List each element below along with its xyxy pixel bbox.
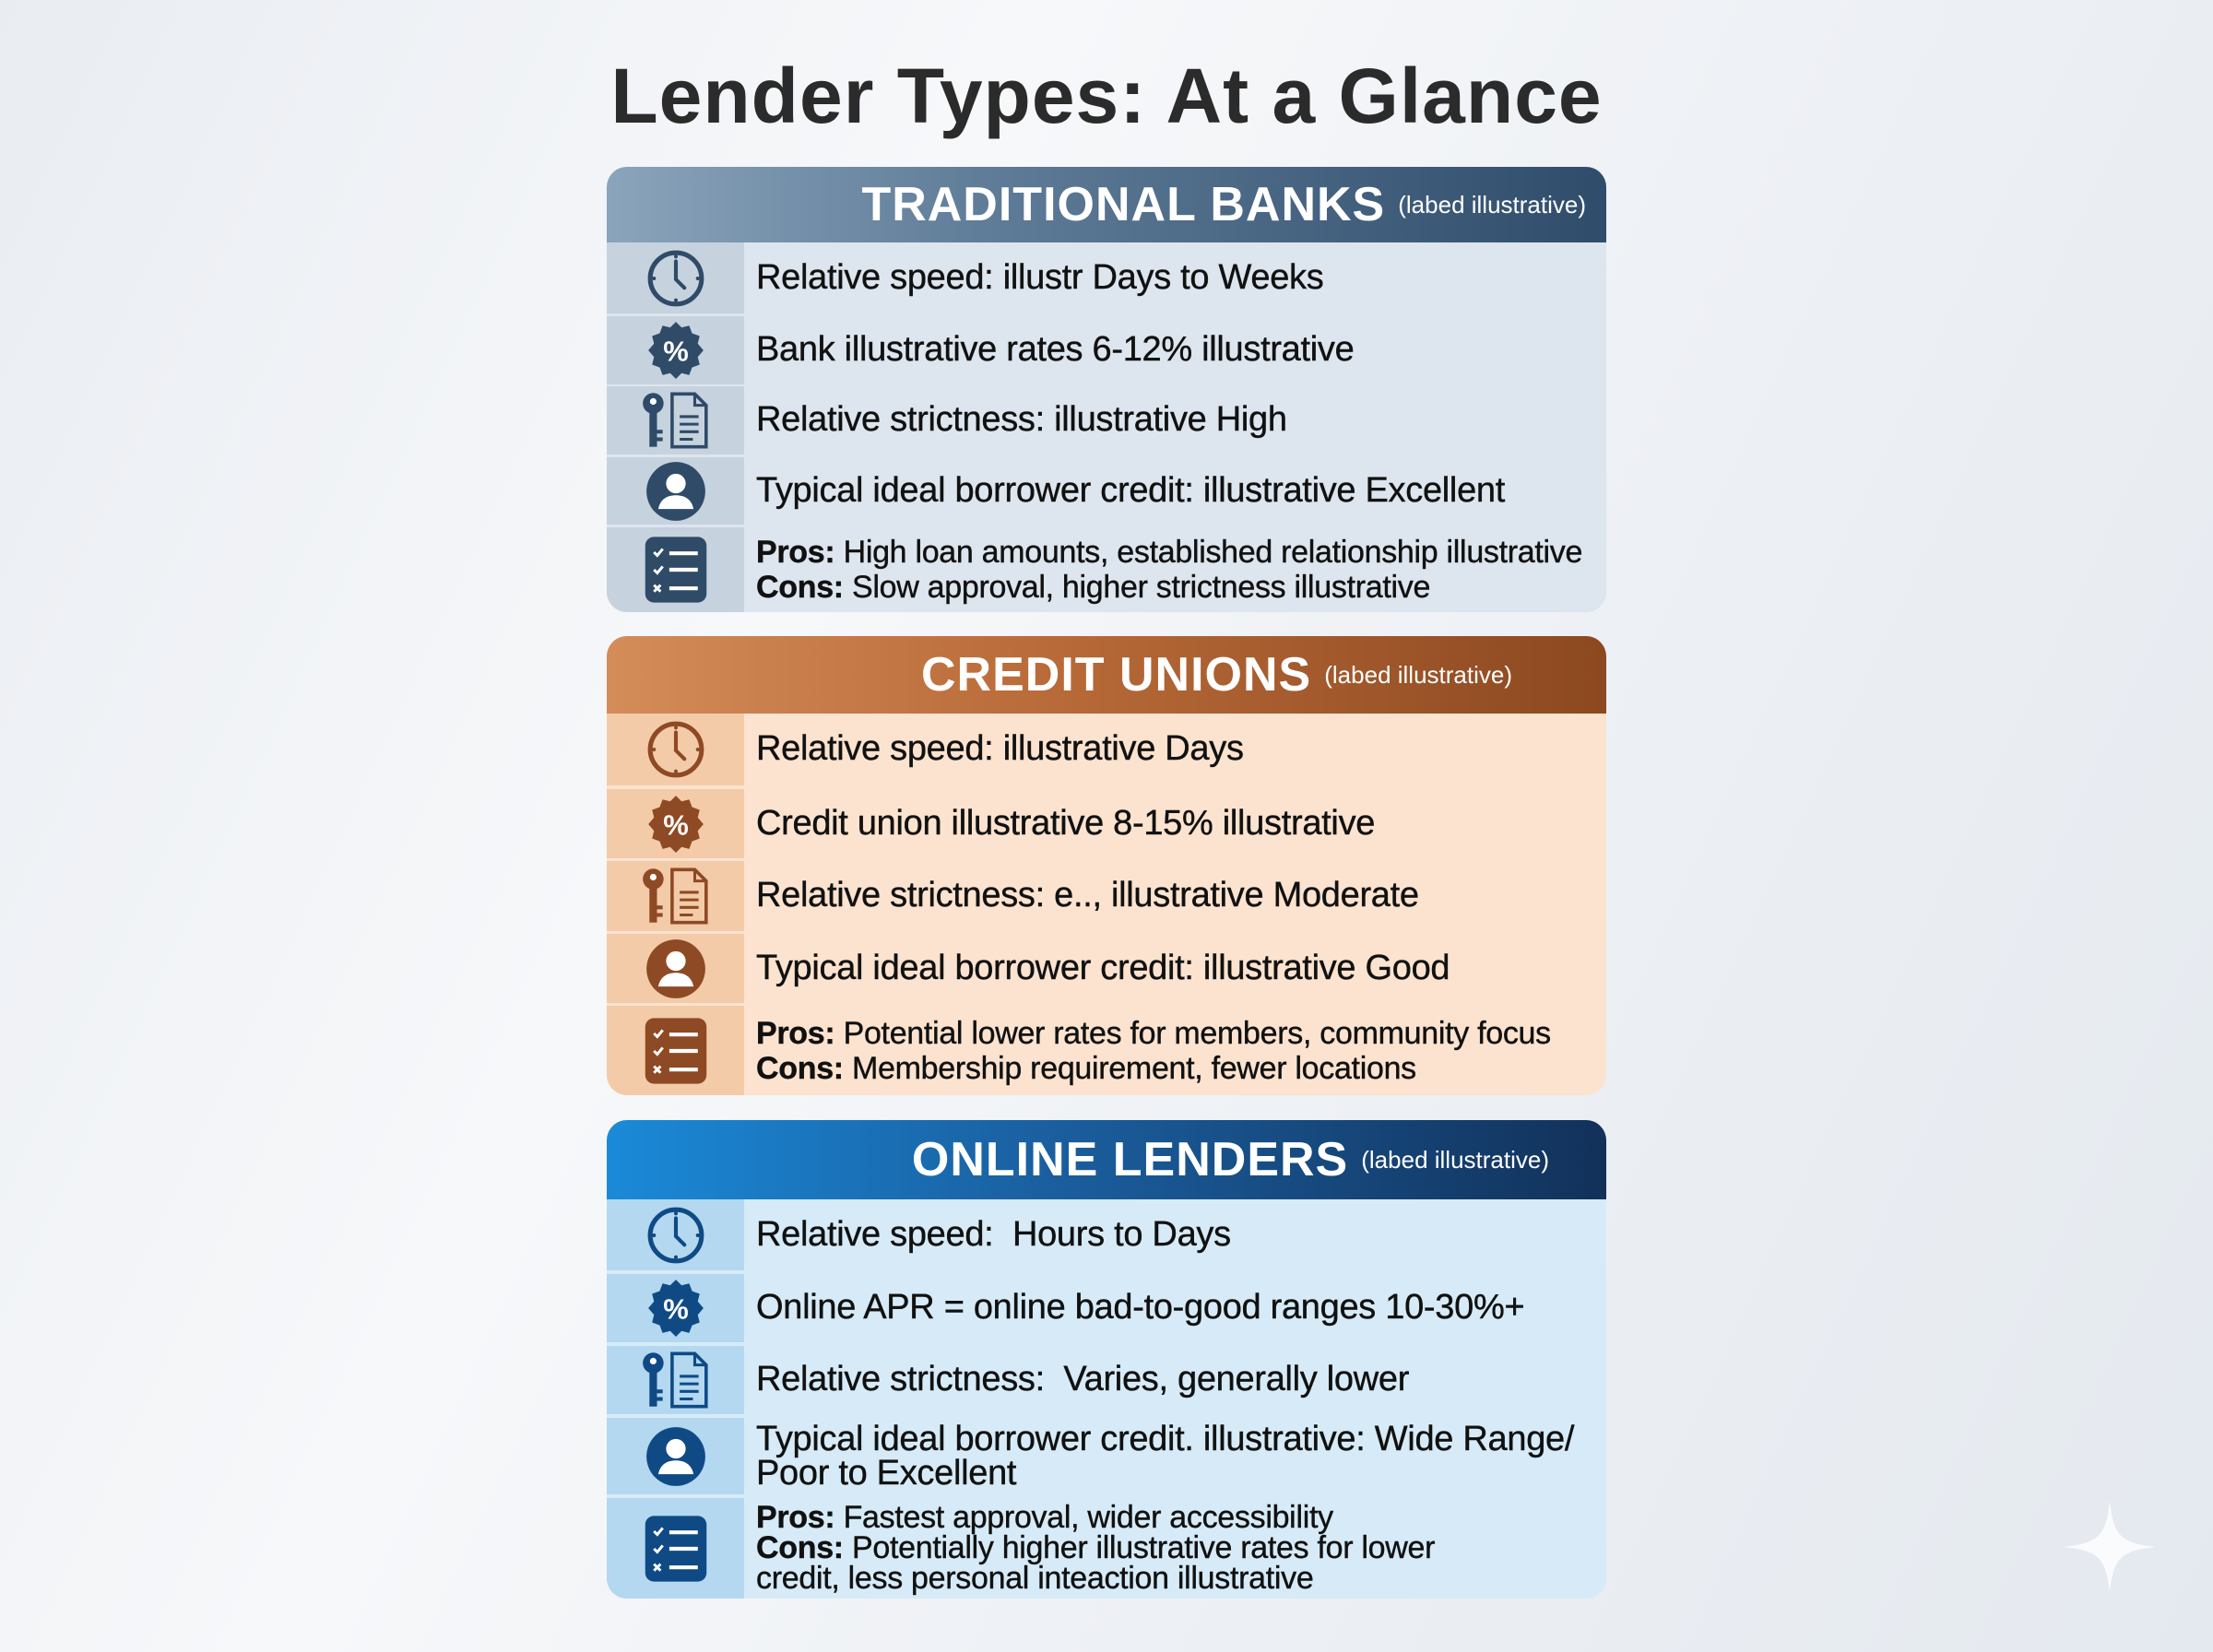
row: strictness [607, 861, 1606, 931]
row: credit: Typical ideal borrower credit: illustrative Good [756, 949, 1450, 987]
row: speed [607, 714, 1606, 785]
row: pros cons: Cons: Slow approval, higher strictness illustrative [756, 570, 1430, 605]
row: strictness: Relative strictness: illustrative High [756, 400, 1287, 439]
row: credit [607, 1418, 1606, 1494]
header: credit unions: CREDIT UNIONS [921, 648, 1311, 702]
header: online lenders: (labed illustrative) [1361, 1145, 1549, 1173]
row: pros cons: Cons: Potentially higher illustrative rates for lower [756, 1530, 1435, 1565]
header: credit unions: (labed illustrative) [1324, 660, 1512, 688]
header: traditional banks: TRADITIONAL BANKS [861, 178, 1385, 231]
row: strictness: Relative strictness: Varies, generally lower [756, 1360, 1409, 1398]
row: pros cons [607, 1006, 1606, 1095]
row: strictness [607, 386, 1606, 454]
title: Lender Types: At a Glance [610, 53, 1603, 139]
row: rates [607, 789, 1606, 858]
header: credit unions [607, 636, 1606, 714]
row: strictness: Relative strictness: e.., illustrative Moderate [756, 876, 1419, 914]
row: strictness [607, 1346, 1606, 1414]
row: pros cons: Pros: High loan amounts, established relationship illustrative [756, 535, 1582, 570]
row: speed: Relative speed: illustrative Days [756, 729, 1244, 768]
row: credit: Typical ideal borrower credit. illustrative: Wide Range/ [756, 1420, 1574, 1458]
row: speed: Relative speed: illustr Days to Weeks [756, 258, 1323, 297]
row: pros cons: Pros: Potential lower rates for members, community focus [756, 1016, 1551, 1051]
panel: credit unions [607, 636, 1606, 1095]
row: rates: Credit union illustrative 8-15% illustrative [756, 804, 1375, 843]
row: rates [607, 316, 1606, 384]
row: speed [607, 1199, 1606, 1270]
row: rates [607, 1274, 1606, 1342]
header: online lenders: ONLINE LENDERS [912, 1133, 1348, 1186]
row: speed: Relative speed: Hours to Days [756, 1215, 1231, 1254]
row: credit: Poor to Excellent [756, 1453, 1016, 1492]
row: credit [607, 934, 1606, 1003]
row: pros cons: Pros: Fastest approval, wider accessibility [756, 1500, 1333, 1535]
row: credit [607, 457, 1606, 525]
panel: online lenders [607, 1120, 1606, 1599]
icon: sparkle [2065, 1503, 2154, 1591]
header: traditional banks [607, 167, 1606, 242]
header: traditional banks: (labed illustrative) [1398, 190, 1586, 218]
row: pros cons [607, 1498, 1606, 1599]
row: pros cons: Cons: Membership requirement, fewer locations [756, 1051, 1416, 1086]
row: pros cons: credit, less personal inteaction illustrative [756, 1561, 1313, 1596]
row: pros cons [607, 527, 1606, 612]
header: online lenders [607, 1120, 1606, 1199]
row: speed [607, 242, 1606, 313]
panel: traditional banks [607, 167, 1606, 612]
row: rates: Bank illustrative rates 6-12% illustrative [756, 330, 1354, 369]
row: rates: Online APR = online bad-to-good ranges 10-30%+ [756, 1288, 1524, 1327]
row: credit: Typical ideal borrower credit: illustrative Excellent [756, 471, 1505, 510]
